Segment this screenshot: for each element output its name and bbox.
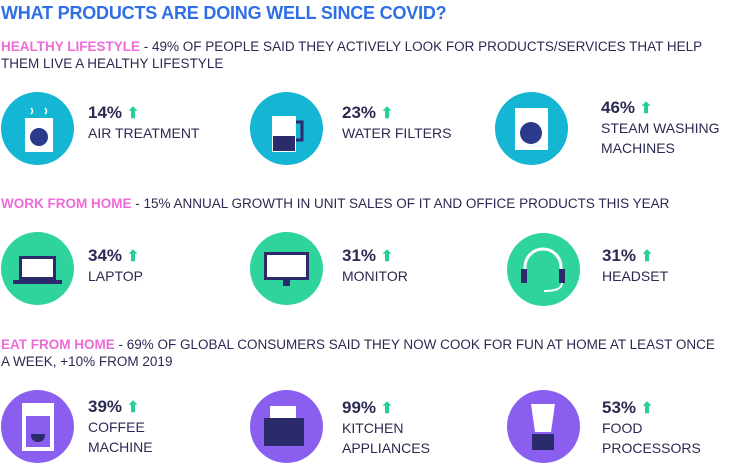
icon: kitchen appliances — [250, 390, 323, 463]
stat: water filters: 23% ⬆ — [342, 103, 393, 122]
stat: laptop: 34% ⬆ — [88, 246, 139, 265]
stat: air treatment — [88, 103, 200, 141]
stat: food processors: FOOD — [602, 420, 642, 436]
stat: headset: HEADSET — [602, 268, 668, 284]
stat: food processors: 53% ⬆ — [602, 398, 653, 417]
icon: headset — [507, 233, 580, 306]
stat: laptop — [88, 246, 143, 284]
stat: kitchen appliances: 99% ⬆ — [342, 398, 393, 417]
icon: water filters — [250, 92, 323, 165]
stat: headset — [602, 246, 668, 284]
stat: coffee machine: COFFEE — [88, 419, 145, 435]
stat: food processors: PROCESSORS — [602, 440, 701, 456]
icon: air treatment — [1, 92, 74, 165]
heading: healthy lifestyle: THEM LIVE A HEALTHY LIFESTYLE — [1, 56, 223, 71]
stat: steam washing machines — [601, 98, 720, 156]
icon: food processors — [507, 390, 580, 463]
stat: air treatment: AIR TREATMENT — [88, 125, 200, 141]
icon: coffee machine — [1, 390, 74, 463]
stat: steam washing machines: 46% ⬆ — [601, 98, 652, 117]
stat: water filters — [342, 103, 451, 141]
title: WHAT PRODUCTS ARE DOING WELL SINCE COVID? — [1, 3, 446, 23]
stat: monitor: MONITOR — [342, 268, 408, 284]
stat: kitchen appliances: APPLIANCES — [342, 440, 430, 456]
stat: laptop: LAPTOP — [88, 268, 143, 284]
stat: kitchen appliances: KITCHEN — [342, 420, 403, 436]
stat: kitchen appliances — [342, 398, 430, 456]
stat: steam washing machines: MACHINES — [601, 140, 675, 156]
stat: air treatment: 14% ⬆ — [88, 103, 139, 122]
heading: work from home: WORK FROM HOME - 15% ANNUAL GROWTH IN UNIT SALES OF IT AND OFFICE PRODUCTS THIS YEAR — [1, 196, 669, 211]
stat: food processors — [602, 398, 701, 456]
stat: water filters: WATER FILTERS — [342, 125, 451, 141]
stat: monitor: 31% ⬆ — [342, 246, 393, 265]
stat: steam washing machines: STEAM WASHING — [601, 120, 720, 136]
stat: coffee machine — [88, 397, 153, 455]
heading: healthy lifestyle — [1, 39, 702, 71]
heading: eat from home: A WEEK, +10% FROM 2019 — [1, 354, 172, 369]
stat: coffee machine: MACHINE — [88, 439, 153, 455]
stat: coffee machine: 39% ⬆ — [88, 397, 139, 416]
icon: monitor — [250, 232, 323, 305]
icon: steam washing machines — [495, 92, 568, 165]
icon: laptop — [1, 232, 74, 305]
stat: monitor — [342, 246, 408, 284]
heading: eat from home: EAT FROM HOME - 69% OF GLOBAL CONSUMERS SAID THEY NOW COOK FOR FUN AT HOME AT LEAST ONCE — [1, 337, 715, 352]
heading: eat from home — [1, 337, 715, 369]
heading: healthy lifestyle: HEALTHY LIFESTYLE - 49% OF PEOPLE SAID THEY ACTIVELY LOOK FOR PRODUCTS/SERVICES THAT HELP — [1, 39, 702, 54]
stat: headset: 31% ⬆ — [602, 246, 653, 265]
